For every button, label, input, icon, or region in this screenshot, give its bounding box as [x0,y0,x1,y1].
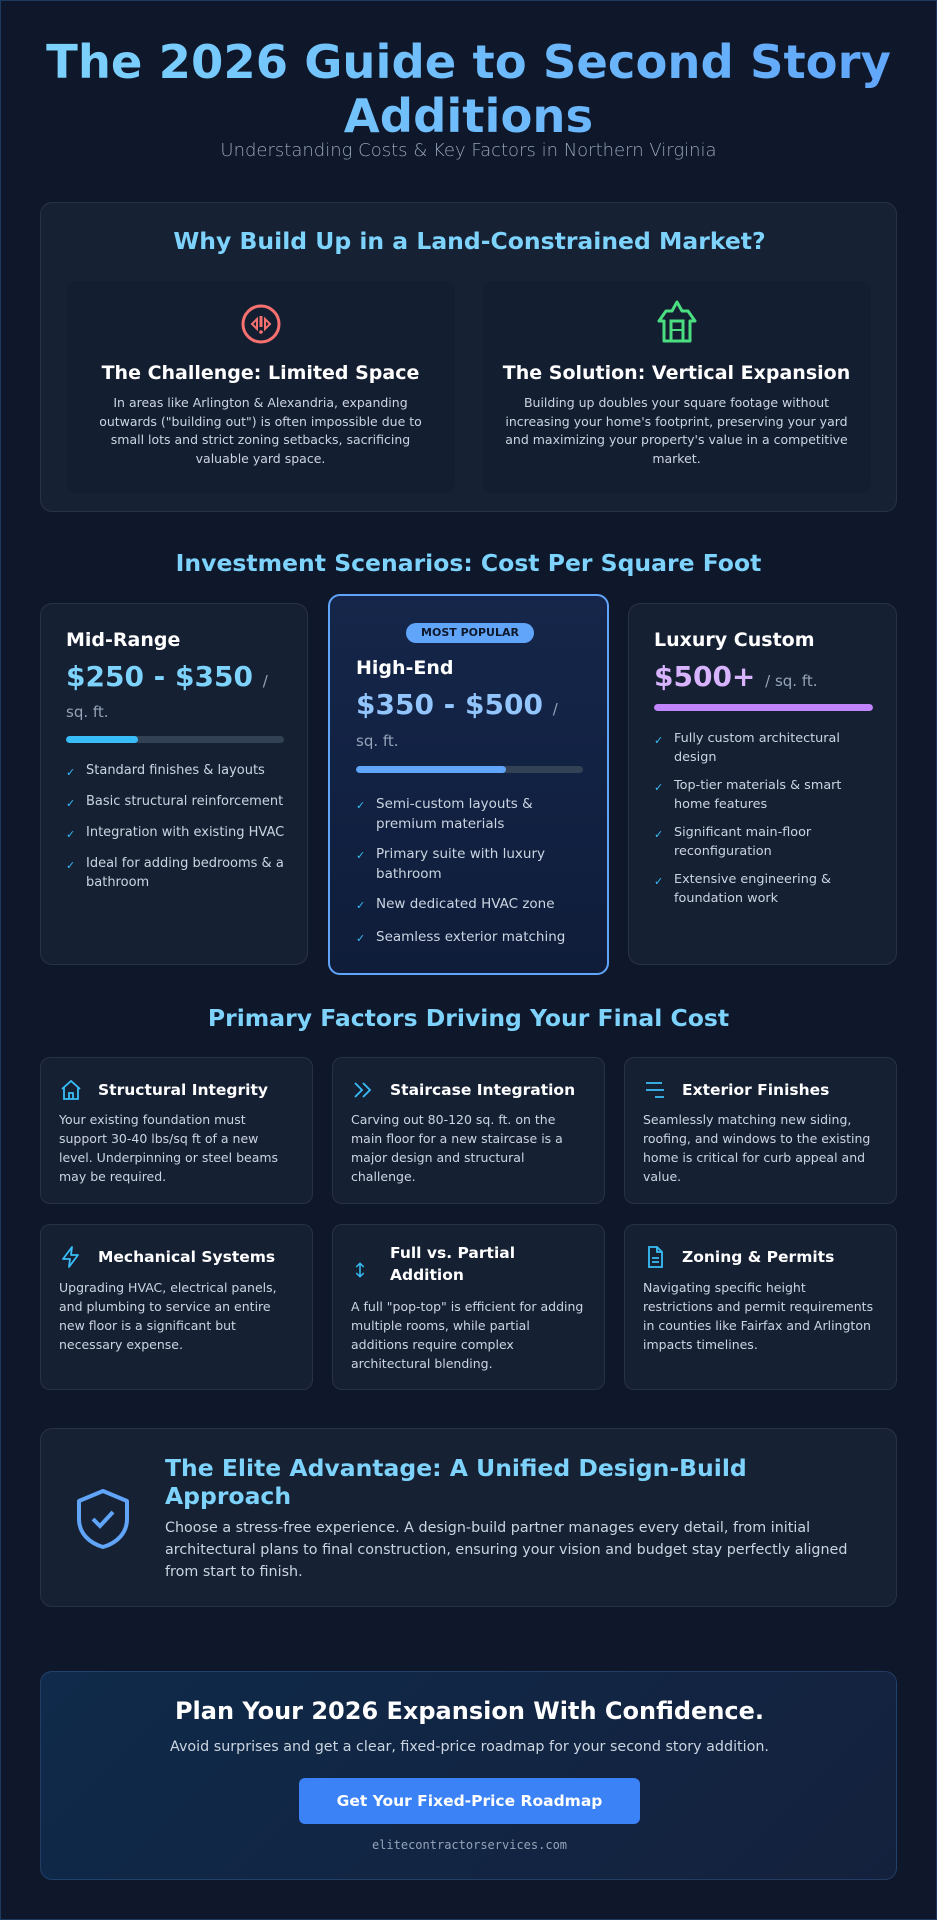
card: mid-range: sq. ft. [66,703,109,721]
factor: structural: Your existing foundation must support 30-40 lbs/sq ft of a new level. Underpinning or steel beams may be required. [59,1112,278,1184]
icon: house [62,1080,80,1100]
feature list [68,763,284,890]
card: mid-range [40,603,308,965]
panel: why build up [40,202,897,512]
icon: document [648,1246,663,1268]
url: elitecontractorservices.com [372,1838,567,1852]
icon: lines [646,1082,664,1098]
factor: mechanical: Upgrading HVAC, electrical panels, and plumbing to service an entire new floor is a significant but necessary expense. [59,1280,277,1352]
feature list: Semi-custom layouts & premium materials [376,796,533,832]
title: The 2026 Guide to Second Story Additions [46,35,891,143]
factor: mechanical [40,1224,313,1390]
badge: MOST POPULAR [421,626,519,639]
button: Get Your Fixed-Price Roadmap [337,1792,602,1810]
panel: elite advantage [40,1428,897,1607]
bar [66,736,284,743]
feature list: New dedicated HVAC zone [376,896,555,912]
factor: full vs partial: Full vs. Partial Addition [390,1244,515,1284]
sub-panel: solution [482,281,871,493]
icon: warning [242,304,280,344]
bar [356,766,583,773]
icon: chevrons [354,1082,372,1098]
factor: mechanical: Mechanical Systems [98,1248,275,1266]
factor: staircase: Carving out 80-120 sq. ft. on the main floor for a new staircase is a major design and structural challenge. [351,1112,563,1184]
icon: house [657,300,696,342]
factor: structural [40,1057,313,1204]
text: cta: Avoid surprises and get a clear, fixed-price roadmap for your second story addition. [170,1739,769,1755]
factor: structural: Structural Integrity [98,1081,268,1099]
icon: bolt [62,1246,79,1268]
factor: zoning: Navigating specific height restrictions and permit requirements in counties like Fairfax and Arlington impacts timelines. [643,1280,873,1352]
feature list: Seamless exterior matching [376,929,565,945]
heading: why build up: Why Build Up in a Land-Constrained Market? [173,227,766,255]
factor: exterior: Exterior Finishes [682,1081,829,1099]
text: challenge: In areas like Arlington & Alexandria, expanding outwards ("building out") is often impossible due to small lots and strict zoning setbacks, sacrificing valuable yard space. [99,395,422,466]
icon: arrows [356,1262,364,1278]
icon: shield [77,1489,129,1549]
factor: exterior: Seamlessly matching new siding, roofing, and windows to the existing home is critical for curb appeal and value. [643,1112,870,1184]
factor: staircase: Staircase Integration [390,1081,575,1099]
card title: Mid-Range [66,629,180,651]
feature list: Ideal for adding bedrooms & a bathroom [86,856,284,890]
feature list: Significant main-floor reconfiguration [674,825,811,858]
factor: staircase [332,1057,605,1204]
feature list: Primary suite with luxury bathroom [376,846,545,882]
card: high-end: sq. ft. [356,732,399,750]
bar [654,704,873,711]
feature list [358,796,565,945]
feature list: Basic structural reinforcement [86,794,283,809]
subheading: solution: The Solution: Vertical Expansion [503,362,850,384]
card: high-end [328,594,609,975]
subtitle: Understanding Costs & Key Factors in Northern Virginia [220,140,717,161]
card: luxury [628,603,897,965]
factor: exterior [624,1057,897,1204]
heading: investment scenarios: Investment Scenarios: Cost Per Square Foot [176,549,761,577]
text: elite: Choose a stress-free experience. A design-build partner manages every detail, from initial architectural plans to final construction, ensuring your vision and budget stay perfectly aligned from start to finish. [165,1520,847,1580]
sub-panel: challenge [66,281,455,493]
factor: full vs partial [332,1224,605,1390]
heading: primary factors: Primary Factors Driving Your Final Cost [208,1004,729,1032]
feature list: Standard finishes & layouts [86,763,265,778]
card title: Luxury Custom [654,629,814,651]
card title: High-End [356,657,454,679]
feature list [656,731,842,906]
price: $250 - $350 / [66,660,268,693]
button [299,1778,640,1824]
panel: cta [40,1671,897,1880]
factor: full vs partial: A full "pop-top" is efficient for adding multiple rooms, while partial additions require complex architectural blending. [351,1299,583,1371]
badge [406,623,534,643]
text: solution: Building up doubles your square footage without increasing your home's footprint, preserving your yard and maximizing your property's value in a competitive market. [505,395,848,466]
factor: zoning [624,1224,897,1390]
feature list: Extensive engineering & foundation work [674,872,831,906]
price: $500+ / sq. ft. [654,660,818,693]
feature list: Integration with existing HVAC [86,825,284,840]
feature list: Fully custom architectural design [674,731,840,764]
heading: elite: The Elite Advantage: A Unified Design-Build Approach [165,1454,747,1510]
subheading: challenge: The Challenge: Limited Space [102,362,419,384]
feature list: Top-tier materials & smart home features [674,778,841,812]
price: $350 - $500 / [356,688,558,721]
factor: zoning: Zoning & Permits [682,1248,834,1266]
heading: cta: Plan Your 2026 Expansion With Confidence. [175,1697,764,1725]
